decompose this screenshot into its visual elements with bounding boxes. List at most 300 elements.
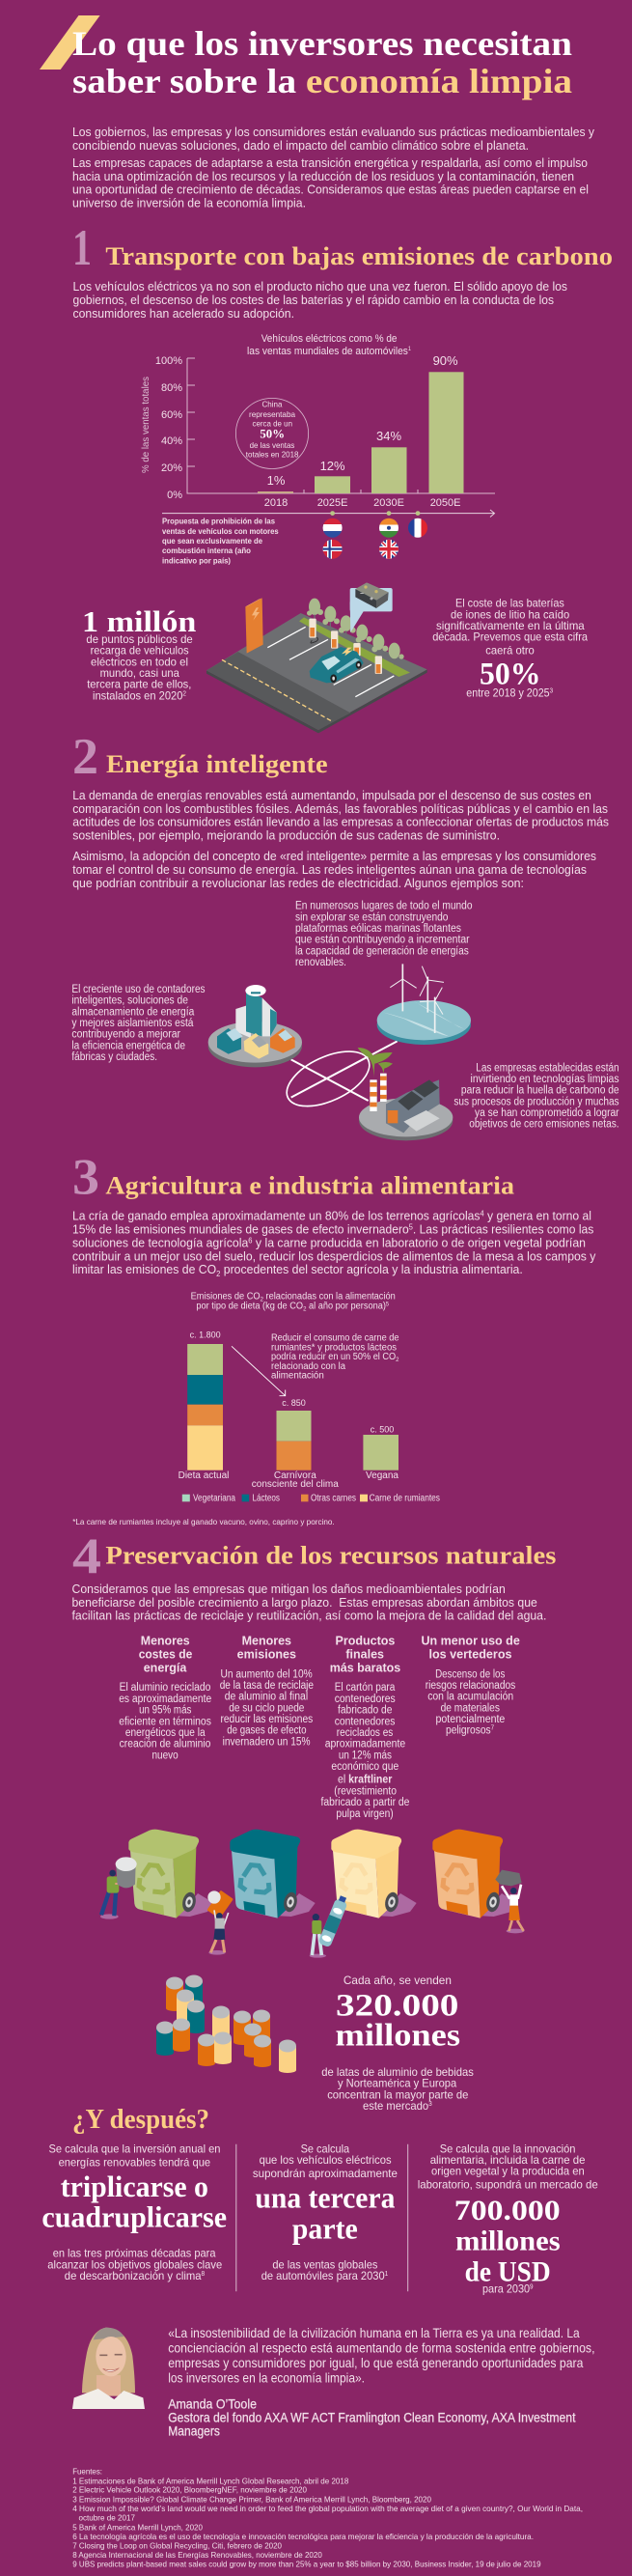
sources: octubre de 2017 — [79, 2513, 135, 2523]
chart title: 5 — [386, 1302, 390, 1308]
legend: Vegetariana — [193, 1494, 235, 1504]
column: electric vehicles: parte — [292, 2211, 358, 2245]
y axis: 20% — [161, 462, 182, 474]
section 3 text: procedentes del sector agrícola y la industria alimentaria. — [220, 1262, 523, 1276]
section 3 text: . Las prácticas resilientes como las — [413, 1222, 594, 1237]
sources: 8 Agencia Internacional de las Energías Renovables, noviembre de 2020 — [72, 2550, 322, 2560]
section 3 text: contribuir a un mejor uso del suelo, reducir los desperdicios de alimentos de la mesa a los campos y — [72, 1248, 596, 1263]
text: smart meters: contribuyendo a mejorar — [71, 1029, 180, 1041]
y axis — [140, 355, 495, 501]
can — [198, 2033, 215, 2066]
category labels: Dieta actual — [179, 1470, 229, 1481]
stat: battery cost 50%: década. Prevemos que esta cifra — [432, 630, 588, 644]
column: renewable investment: alcanzar los objetivos globales clave — [47, 2257, 223, 2271]
callout: China: 50% — [260, 426, 285, 440]
column: food innovation: 9 — [530, 2283, 534, 2290]
intro text: una oportunidad de crecimiento de décadas. Consideramos que estas áreas pueden captarse en el — [72, 182, 589, 197]
section 1 heading: Transporte con bajas emisiones de carbono — [105, 242, 613, 270]
sources: 3 Emission Impossible? Global Climate Change Primer, Bank of America Merrill Lynch, Bloomberg, 2020 — [72, 2494, 431, 2504]
column: less landfill: potencialmente — [436, 1714, 505, 1725]
section 3 heading: Agricultura e industria alimentaria — [105, 1172, 514, 1200]
column: food innovation — [418, 2142, 598, 2295]
section 4 heading: Preservación de los recursos naturales — [105, 1541, 556, 1569]
year labels: 2030E — [373, 497, 404, 509]
stat: 320.000 millones: 3 — [428, 2101, 432, 2108]
person with tin can — [100, 1857, 137, 1919]
section 3 heading: 3 — [72, 1150, 99, 1206]
section 3 text: 5 — [409, 1223, 413, 1232]
section 2 heading: Energía inteligente — [106, 750, 328, 778]
column: lower emissions: reducir las emisiones — [220, 1714, 313, 1725]
stat: battery cost 50%: caerá otro — [485, 644, 535, 658]
can — [254, 2035, 271, 2067]
column: less landfill: los vertederos — [428, 1646, 511, 1661]
section 3 heading — [72, 1150, 514, 1206]
text: offshore wind: sin explorar se están construyendo — [295, 911, 448, 923]
title — [40, 15, 572, 100]
battery callout — [350, 582, 393, 632]
ban proposal text: combustión interna (año — [162, 546, 251, 555]
can — [253, 2010, 270, 2044]
quote author: Amanda O’Toole — [168, 2395, 257, 2411]
section 2 text: tomar el control de su consumo de energía. Las redes inteligentes aúnan una gama de tecnologías — [72, 862, 587, 877]
section 3 text: La cría de ganado emplea aproximadamente un 80% de los terrenos agrícolas — [72, 1209, 508, 1223]
chart title: por tipo de dieta (kg de CO — [196, 1302, 312, 1312]
column: less landfill: Un menor uso de — [421, 1633, 520, 1647]
y axis: % de las ventas totales — [140, 377, 151, 473]
section 1 text — [73, 279, 567, 321]
column: lower emissions: de gases de efecto — [227, 1725, 307, 1737]
column: electric vehicles: una tercera — [255, 2181, 396, 2215]
column: electric vehicles: que los vehículos eléctricos — [260, 2153, 392, 2167]
column: food innovation: Se calcula que la innovación — [440, 2142, 575, 2155]
section 1 heading — [72, 220, 613, 276]
text: offshore wind: la capacidad de generación de energías — [295, 945, 469, 957]
bar chart: electric vehicles share of sales — [140, 333, 495, 565]
illustration: EV charging car park — [206, 582, 427, 733]
chargers — [309, 619, 382, 674]
trees — [307, 599, 404, 659]
section 3 text: 4 — [480, 1210, 484, 1218]
can — [156, 2022, 174, 2056]
callout: China: cerca de un — [253, 419, 292, 429]
footnote: *La carne de rumiantes incluye al ganado vacuno, ovino, caprino y porcino. — [72, 1517, 335, 1526]
stat: 1 millón: eléctricos en todo el — [91, 655, 188, 668]
column: cheaper end products: aproximadamente — [325, 1739, 405, 1750]
value labels: 12% — [320, 459, 345, 473]
column: less landfill: 7 — [491, 1725, 494, 1732]
text: offshore wind: renovables. — [295, 957, 346, 968]
sources — [72, 2466, 583, 2569]
annotation: 2 — [396, 1357, 399, 1363]
flags — [322, 518, 428, 559]
ban proposal text — [162, 517, 279, 565]
annotation: podría reducir en un 50% el CO — [271, 1352, 407, 1362]
bar: vegan: c. 500 — [371, 1425, 394, 1435]
wind farm — [377, 964, 471, 1045]
legend: Otras carnes — [311, 1494, 356, 1504]
chart title: Vehículos eléctricos como % de — [261, 333, 398, 345]
stat: 1 millón: 1 millón — [82, 604, 196, 638]
annotation: Reducir el consumo de carne de — [271, 1332, 399, 1343]
column: cheaper end products: contenedores — [335, 1716, 396, 1727]
green strip — [299, 617, 410, 677]
car — [310, 647, 364, 683]
value labels: 34% — [376, 429, 401, 443]
column: cheaper end products: (revestimiento — [334, 1785, 397, 1797]
annotation: rumiantes* y productos lácteos — [271, 1342, 397, 1353]
stacked bar chart: diet emissions — [179, 1292, 440, 1504]
column: cheaper end products: El cartón para — [335, 1682, 396, 1694]
section 3 text: 6 — [248, 1236, 253, 1245]
column: food innovation: de USD — [465, 2255, 551, 2287]
chart title: 2 — [303, 1306, 307, 1313]
can — [166, 1977, 183, 2011]
y axis: 80% — [161, 382, 182, 394]
stat: battery cost 50%: 50% — [480, 657, 540, 691]
can — [244, 2024, 261, 2058]
section 1 text: consumidores han acelerado su adopción. — [73, 306, 294, 321]
timeline arrow — [162, 510, 494, 518]
column: cheaper end products: fabricado de — [338, 1705, 392, 1717]
section 2 text: que podrían contribuir a revolucionar las redes de electricidad. Algunos ejemplos son: — [72, 876, 524, 890]
stat: 320.000 millones: de latas de aluminio de bebidas — [321, 2065, 474, 2079]
column: lower energy costs: nuevo — [152, 1750, 179, 1761]
ban proposal text: ventas de vehículos con motores — [162, 526, 279, 536]
bars — [258, 372, 463, 493]
sources: 2 Electric Vehicle Outlook 2020, BloombergNEF, noviembre de 2020 — [72, 2485, 307, 2495]
quote — [168, 2325, 594, 2385]
column: food innovation: laboratorio, supondrá un mercado de — [418, 2178, 598, 2192]
category labels: Carnívora — [274, 1470, 316, 1481]
legend: Lácteos — [253, 1494, 280, 1504]
column: lower energy costs: Menores — [141, 1633, 190, 1647]
stat: 1 millón: de puntos públicos de — [86, 632, 193, 646]
section 4 text — [71, 1582, 546, 1623]
person with drink can — [206, 1890, 234, 1955]
chart title: las ventas mundiales de automóviles — [247, 346, 421, 357]
category labels: Vegana — [366, 1470, 398, 1481]
intro text — [72, 125, 594, 210]
section 2 text: comparación con los combustibles fósiles. Además, las favorables políticas públicas y el cambio en las — [72, 801, 608, 816]
stat: 1 millón: instalados en 2020 — [93, 688, 190, 702]
section 2 heading: 2 — [72, 729, 98, 785]
quote: empresas y consumidores por igual, lo que está generando oportunidades para — [168, 2355, 584, 2370]
sources: 6 La tecnología agrícola es el uso de tecnología e innovación tecnológica para mejorar la eficiencia y la producción de la agricultura. — [72, 2532, 534, 2541]
y axis: 100% — [155, 355, 182, 367]
section 1 heading: 1 — [72, 220, 92, 276]
column: cheaper end products: un 12% más — [339, 1750, 392, 1761]
column: less landfill: con la acumulación — [427, 1692, 513, 1703]
city — [208, 985, 302, 1067]
title: Lo que los inversores necesitan — [72, 24, 572, 63]
text: established companies — [453, 1062, 619, 1131]
section 2 text: actitudes de los consumidores están llevando a las empresas a confeccionar ofertas de productos más — [72, 815, 609, 829]
text: smart meters: almacenamiento de energía — [71, 1006, 195, 1018]
stat: 320.000 millones: Cada año, se venden — [343, 1974, 452, 1987]
section 1 text: Los vehículos eléctricos ya no son el producto nicho que una vez fueron. El sólido apoyo de los — [73, 279, 567, 294]
section 2 text: sostenibles, por ejemplo, mejorando la producción de sus cadenas de suministro. — [72, 827, 500, 842]
factory — [358, 1048, 453, 1140]
column: food innovation: origen vegetal y la producida en — [431, 2165, 585, 2178]
stat: 1 millón: recarga de vehículos — [91, 644, 189, 658]
stat: 1 millón — [82, 604, 196, 702]
column: less landfill: peligrosos — [446, 1725, 496, 1737]
text: smart meters: la eficiencia energética de — [71, 1040, 185, 1051]
column: lower emissions: invernadero un 15% — [223, 1736, 311, 1748]
y axis: 60% — [161, 409, 182, 421]
column: electric vehicles: de automóviles para 2030 — [261, 2269, 395, 2282]
bar: current diet — [187, 1330, 223, 1470]
column: food innovation: para 2030 — [482, 2282, 535, 2295]
bar: current diet: c. 1.800 — [190, 1330, 221, 1339]
charge sign — [245, 598, 263, 654]
stat: battery cost 50%: entre 2018 y 2025 — [466, 686, 560, 700]
column: cheaper end products: más baratos — [330, 1660, 400, 1674]
intro text: Los gobiernos, las empresas y los consumidores están evaluando sus prácticas medioambientales y — [72, 125, 594, 139]
section 3 text: 2 — [216, 1270, 221, 1278]
column: cheaper end products: fabricado a partir de — [320, 1797, 409, 1808]
column: cheaper end products: el kraftliner — [338, 1775, 393, 1786]
bin: orange — [432, 1830, 518, 1918]
text: smart meters: fábricas y ciudades. — [71, 1051, 157, 1063]
column: less landfill: Descenso de los — [435, 1668, 506, 1680]
category labels: consciente del clima — [252, 1479, 339, 1490]
y axis: 40% — [161, 435, 182, 447]
bin: green — [128, 1830, 214, 1918]
sources: 9 UBS predicts plant-based meat sales could grow by more than 25% a year to $85 billion by 2030, Business Insider, 19 de julio de 2019 — [72, 2560, 541, 2569]
portrait — [72, 2328, 145, 2409]
callout: China: China — [262, 400, 283, 409]
intro text: Las empresas capaces de adaptarse a esta transición energética y respaldarla, así como el impulso — [72, 155, 588, 170]
column: electric vehicles: Se calcula — [301, 2142, 349, 2155]
stat: battery cost 50% — [432, 597, 588, 700]
bar: climate-conscious carnivore: c. 850 — [282, 1398, 306, 1408]
can — [173, 2018, 190, 2052]
column: renewable investment: cuadruplicarse — [41, 2200, 227, 2234]
column: lower emissions: de aluminio al final — [225, 1692, 308, 1703]
section 4 heading — [72, 1528, 556, 1584]
text: offshore wind: plataformas eólicas marinas flotantes — [295, 923, 461, 935]
column: lower energy costs — [119, 1633, 211, 1761]
callout: China: totales en 2018 — [246, 450, 299, 460]
legend: Carne de rumiantes — [370, 1494, 440, 1504]
column: lower energy costs: eficiente en términos — [119, 1716, 211, 1727]
column: food innovation: 700.000 — [454, 2195, 561, 2226]
bar: climate-conscious carnivore — [276, 1398, 311, 1470]
annotation: alimentación — [271, 1371, 324, 1382]
column: lower emissions: de la tasa de reciclaje — [220, 1680, 314, 1692]
can — [177, 1989, 194, 2024]
stat: 320.000 millones: este mercado — [363, 2099, 433, 2113]
intro text: hacia una optimización de los recursos y la reducción de los residuos y la contaminación, tienen — [72, 169, 574, 183]
column: cheaper end products: contenedores — [335, 1694, 396, 1705]
column: food innovation: alimentaria, incluida la carne de — [430, 2153, 586, 2167]
section 3 text: 15% de las emisiones mundiales de gases de efecto invernadero — [72, 1222, 434, 1237]
section 2 heading — [72, 729, 328, 785]
illustration: recycling bins — [100, 1830, 524, 1958]
year labels: 2050E — [430, 497, 461, 509]
column: lower energy costs: energéticos que la — [125, 1727, 206, 1739]
bar: vegan — [363, 1425, 398, 1470]
section 4 text: facilitan las prácticas de reciclaje y reutilización, así como la mejora de la calidad del agua. — [71, 1609, 546, 1623]
ban proposal text: Propuesta de prohibición de las — [162, 517, 275, 526]
connecting lines — [279, 1040, 398, 1117]
y axis: 0% — [167, 490, 182, 501]
stat: 1 millón: 2 — [182, 690, 186, 697]
section 3 text: limitar las emisiones de CO — [72, 1262, 225, 1276]
value labels: 1% — [267, 473, 286, 488]
annotation: relacionado con la — [271, 1361, 345, 1372]
column: food innovation: millones — [455, 2226, 561, 2257]
section 2 text — [72, 788, 609, 890]
column: lower energy costs: creación de aluminio — [120, 1739, 210, 1750]
column: cheaper end products — [320, 1633, 409, 1820]
column: renewable investment: Se calcula que la inversión anual en — [48, 2142, 220, 2155]
category labels — [179, 1470, 398, 1490]
section 4 heading: 4 — [72, 1528, 101, 1584]
section 1 text: gobiernos, el descenso de los costes de las baterías y el rápido cambio en la conducta de los — [73, 293, 554, 307]
chart title: Emisiones de CO — [191, 1292, 265, 1302]
sources: 4 How much of the world’s land would we need in order to feed the global population with the average diet of a given country?, Our World in Data, — [72, 2504, 583, 2513]
callout: China — [235, 398, 309, 469]
chart title: al año por persona) — [306, 1302, 386, 1312]
column: electric vehicles: de las ventas globales — [272, 2257, 377, 2271]
can — [234, 2010, 251, 2045]
column: lower emissions: de su ciclo puede — [229, 1702, 304, 1714]
column: lower emissions — [220, 1633, 314, 1748]
person with bag — [495, 1870, 524, 1933]
stat: 320.000 millones: y Norteamérica y Europa — [338, 2077, 456, 2090]
sources: Fuentes: — [72, 2466, 102, 2476]
quote author: Managers — [168, 2422, 220, 2438]
can — [187, 2001, 205, 2033]
arrow — [232, 1346, 286, 1396]
section 4 text: beneficiarse del posible crecimiento a largo plazo. Estas empresas abordan ámbitos que — [71, 1595, 537, 1610]
title: saber sobre la economía limpia — [72, 62, 572, 100]
stat: 1 millón: tercera parte de ellos, — [87, 678, 191, 691]
value labels: 90% — [433, 353, 458, 368]
can — [212, 2006, 230, 2040]
stat: 320.000 millones: millones — [336, 2018, 460, 2053]
column: lower energy costs: costes de — [139, 1646, 192, 1661]
column: electric vehicles — [253, 2142, 398, 2282]
column: renewable investment: 8 — [202, 2271, 205, 2278]
stat: 320.000 millones: 320.000 — [336, 1988, 458, 2023]
column: renewable investment: de descarbonización y clima — [65, 2269, 210, 2282]
text: offshore wind: que están contribuyendo a incrementar — [295, 935, 470, 946]
column: cheaper end products: pulpa virgen) — [336, 1808, 394, 1820]
chart title: 1 — [408, 347, 412, 352]
divider — [235, 2144, 237, 2291]
column: lower emissions: emisiones — [237, 1646, 296, 1661]
year labels: 2018 — [264, 497, 288, 509]
illustration: smart grid — [208, 964, 471, 1140]
text: established companies: invirtiendo en tecnologías limpias — [471, 1074, 619, 1085]
column: lower energy costs: es aproximadamente — [119, 1694, 211, 1705]
section 2 text: Asimismo, la adopción del concepto de «red inteligente» permite a las empresas y los consumidores — [72, 849, 596, 863]
text: smart meters: El creciente uso de contadores — [71, 984, 206, 995]
callout: China: representaba — [249, 409, 295, 419]
chart title — [247, 333, 412, 357]
column: less landfill: riesgos relacionados — [426, 1680, 516, 1692]
section 3 text: y genera en torno al — [484, 1209, 591, 1223]
stat: 320.000 millones — [321, 1974, 474, 2113]
can — [279, 2039, 296, 2073]
quote author: Gestora del fondo AXA WF ACT Framlington Clean Economy, AXA Investment — [168, 2409, 576, 2424]
platform — [206, 669, 427, 733]
stat: battery cost 50%: 3 — [550, 688, 553, 695]
stat: battery cost 50%: de iones de litio ha caído — [451, 607, 569, 621]
column: renewable investment: triplicarse o — [61, 2170, 208, 2203]
sources: 5 Bank of America Merrill Lynch, 2020 — [72, 2522, 203, 2532]
column: lower energy costs: un 95% más — [139, 1705, 192, 1717]
text: smart meters: y mejores aislamientos está — [71, 1018, 194, 1029]
chart title: relacionadas con la alimentación — [263, 1292, 396, 1302]
can — [185, 1975, 203, 2009]
column: renewable investment — [41, 2142, 227, 2282]
column: less landfill — [421, 1633, 520, 1737]
legend — [182, 1494, 440, 1504]
stat: battery cost 50%: significativamente en la última — [436, 619, 585, 632]
section 3 text: soluciones de tecnología agrícola — [72, 1235, 259, 1249]
callout: China: de las ventas — [250, 440, 294, 450]
person with bottle — [310, 1894, 349, 1958]
intro text: concibiendo nuevas soluciones, dado el impacto del cambio climático sobre el planeta. — [72, 138, 529, 153]
illustration: aluminium cans — [156, 1975, 296, 2073]
sources: 7 Closing the Loop on Global Recycling, Citi, febrero de 2020 — [72, 2540, 282, 2550]
quote author — [168, 2395, 576, 2438]
column: cheaper end products: finales — [345, 1646, 384, 1661]
text: offshore wind — [295, 901, 473, 968]
heading: what next: ¿Y después? — [72, 2104, 209, 2135]
column: electric vehicles: 1 — [385, 2271, 388, 2278]
annotation — [271, 1332, 399, 1382]
intro text: universo de inversión de la economía limpia. — [72, 195, 306, 210]
stat: 1 millón: mundo, casi una — [100, 666, 179, 680]
text: smart meters: inteligentes, soluciones de — [71, 995, 188, 1007]
column: renewable investment: energías renovables tendrá que — [59, 2155, 210, 2169]
year labels: 2025E — [317, 497, 348, 509]
stat: battery cost 50%: El coste de las baterías — [455, 597, 564, 610]
column: lower emissions: Un aumento del 10% — [220, 1668, 313, 1680]
section 3 text: y la carne producida en laboratorio o de origen vegetal podrían — [253, 1235, 586, 1249]
section 2 text: La demanda de energías renovables está aumentando, impulsada por el descenso de sus costes en — [72, 788, 591, 802]
ban proposal text: que sean exclusivamente de — [162, 536, 262, 546]
bin: teal — [230, 1830, 316, 1918]
column: lower energy costs: El aluminio reciclado — [120, 1682, 210, 1694]
bin: yellow — [331, 1830, 417, 1918]
quote: los inversores en la economía limpia». — [168, 2369, 365, 2385]
parking lines — [267, 627, 394, 697]
column: cheaper end products: reciclados es — [337, 1727, 394, 1739]
value labels — [267, 353, 458, 488]
year labels — [264, 497, 461, 509]
column: less landfill: de materiales — [441, 1702, 500, 1714]
sources: 1 Estimaciones de Bank of America Merrill Lynch Global Research, abril de 2018 — [72, 2476, 349, 2485]
section 4 text: Consideramos que las empresas que mitigan los daños medioambientales podrían — [71, 1582, 506, 1596]
divider — [407, 2144, 409, 2291]
stat: 320.000 millones: concentran la mayor parte de — [327, 2087, 469, 2101]
section 3 text — [72, 1209, 596, 1278]
column: lower emissions: Menores — [242, 1633, 291, 1647]
text: smart meters — [71, 984, 206, 1063]
column: cheaper end products: económico que — [331, 1761, 398, 1773]
can — [214, 2031, 232, 2064]
text: offshore wind: En numerosos lugares de todo el mundo — [295, 901, 473, 912]
column: lower energy costs: energía — [144, 1660, 187, 1674]
ban proposal text: indicativo por país) — [162, 555, 231, 565]
